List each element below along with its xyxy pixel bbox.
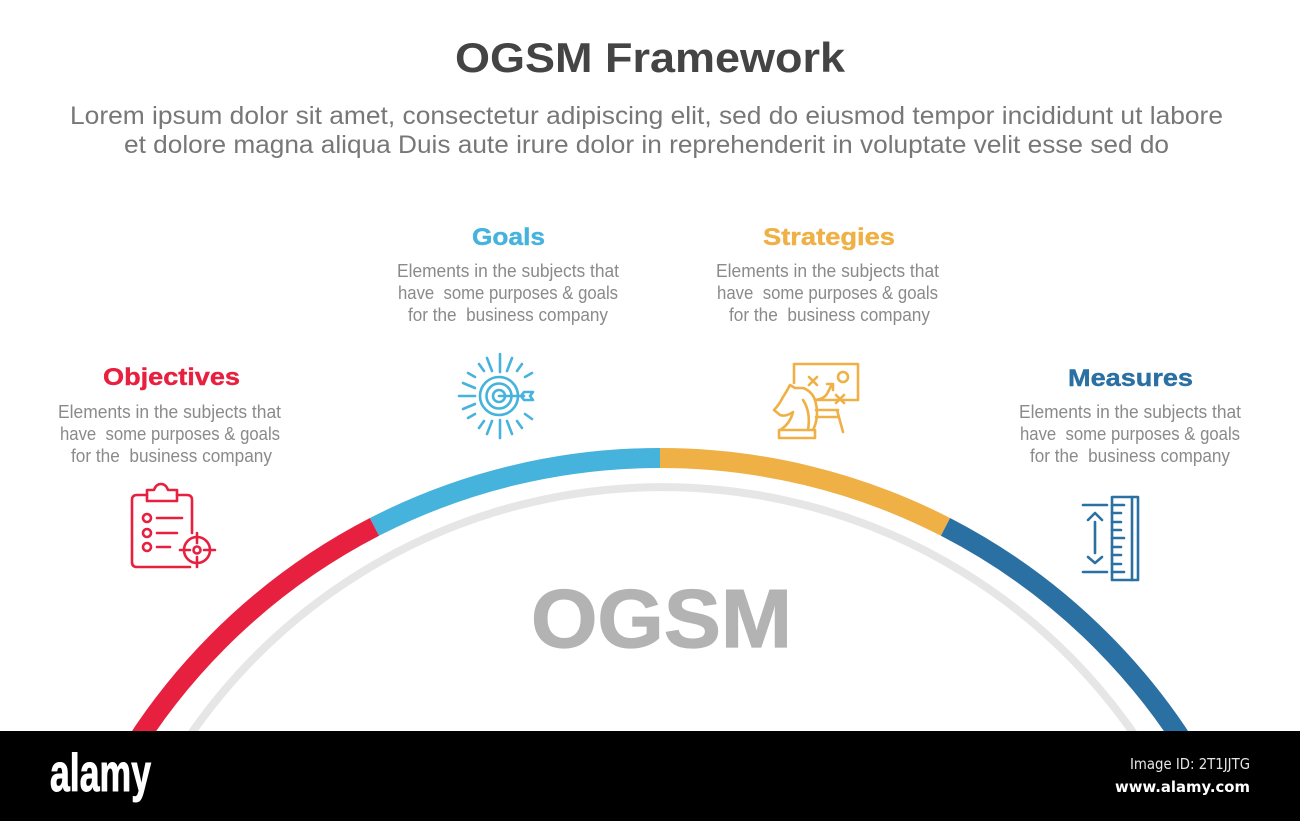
icon: chess knight and strategy board (774, 364, 858, 438)
icon: ruler with height arrow (1083, 497, 1138, 580)
intro text block: et dolore magna aliqua Duis aute irure dolor in reprehenderit in voluptate velit esse sed do (124, 131, 1169, 159)
measures description: for the business company (1030, 446, 1230, 466)
title: OGSM Framework (455, 34, 846, 81)
centre label: OGSM (531, 572, 792, 665)
goals heading: Goals (472, 224, 545, 251)
objectives description: for the business company (71, 446, 272, 466)
objectives description (58, 402, 281, 466)
semicircle ring chart (103, 458, 1217, 800)
intro text block: Lorem ipsum dolor sit amet, consectetur adipiscing elit, sed do eiusmod tempor incididunt ut labore (70, 102, 1223, 130)
goals description: for the business company (408, 305, 608, 325)
arc segment: objectives (103, 527, 375, 800)
measures description: have some purposes & goals (1020, 424, 1240, 444)
measures description: Elements in the subjects that (1019, 402, 1241, 422)
watermark bar (0, 731, 1300, 821)
strategies description: for the business company (729, 305, 930, 325)
panel: strategies (716, 224, 939, 438)
image id: Image ID: 2T1JJTG (1130, 755, 1250, 773)
objectives description: have some purposes & goals (60, 424, 280, 444)
strategies description: Elements in the subjects that (716, 261, 939, 281)
measures heading: Measures (1068, 365, 1193, 392)
strategies description (716, 261, 939, 325)
strategies description: have some purposes & goals (717, 283, 938, 303)
arc segment: goals (374, 458, 660, 527)
goals description: Elements in the subjects that (397, 261, 619, 281)
goals description (397, 261, 619, 325)
panel: goals (397, 224, 619, 438)
intro text block (70, 102, 1223, 159)
arc segment: measures (946, 527, 1217, 800)
website: www.alamy.com (1115, 778, 1250, 796)
icon: clipboard with target (132, 484, 215, 567)
objectives heading: Objectives (103, 364, 240, 391)
strategies heading: Strategies (763, 224, 895, 251)
panel: measures (1019, 365, 1241, 580)
goals description: have some purposes & goals (398, 283, 618, 303)
panel: objectives (58, 364, 281, 567)
objectives description: Elements in the subjects that (58, 402, 281, 422)
alamy logo: alamy (50, 744, 151, 803)
measures description (1019, 402, 1241, 466)
arc segment: strategies (660, 458, 946, 527)
inner grey arc (152, 487, 1174, 800)
icon: target with rays (459, 354, 533, 438)
